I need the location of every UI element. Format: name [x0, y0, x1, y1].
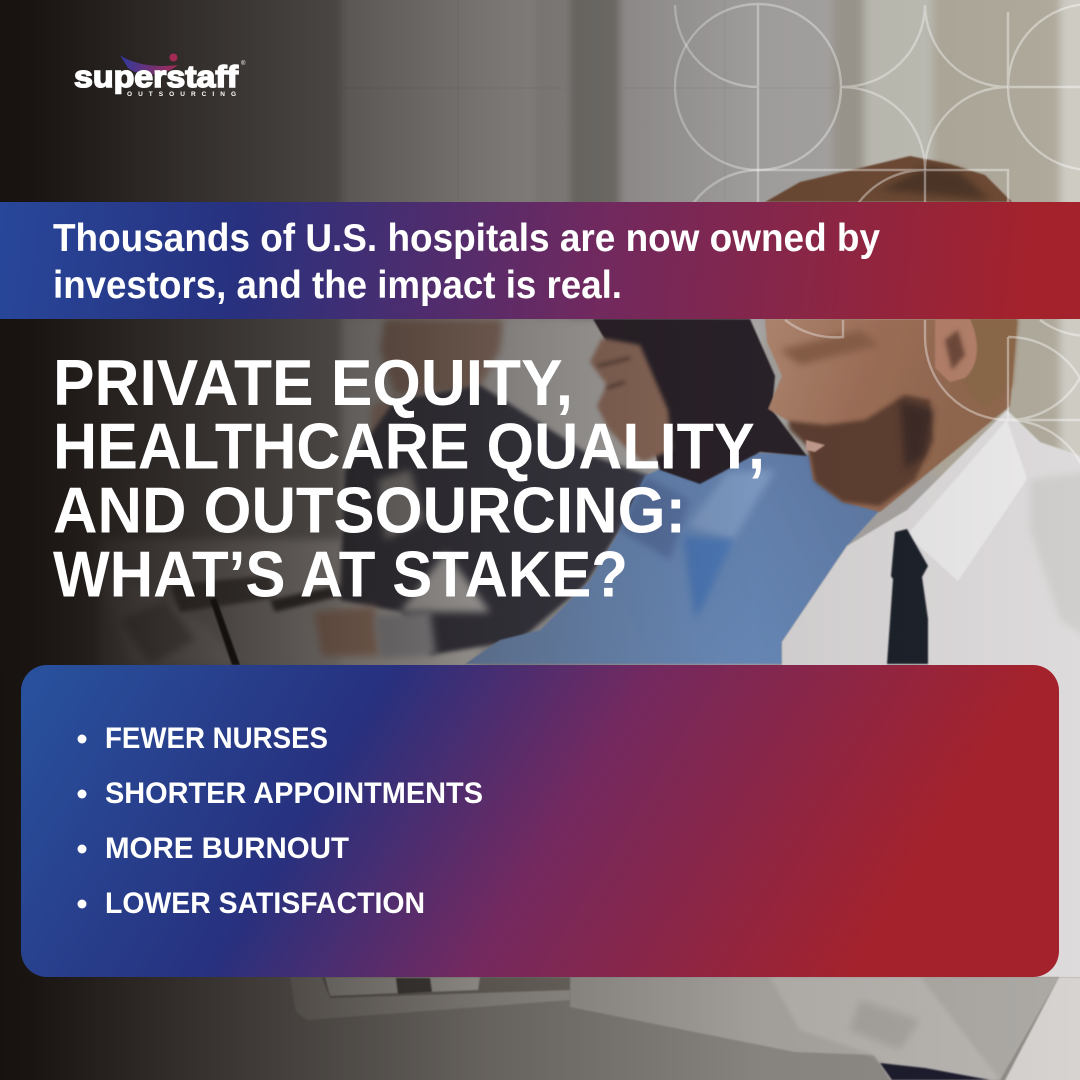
logo swoosh [120, 55, 178, 74]
bullet: fewer nurses: FEWER NURSES [105, 722, 328, 755]
bearded man [765, 156, 1018, 512]
bullet: shorter appointments: SHORTER APPOINTMENTS [105, 777, 483, 810]
logo: superstaff outsourcing [74, 54, 246, 98]
main heading: AND OUTSOURCING: [53, 474, 686, 546]
subtitle text: Thousands of U.S. hospitals are now owned by [53, 217, 880, 260]
main heading: WHAT’S AT STAKE? [53, 538, 628, 610]
subtitle text: investors, and the impact is real. [53, 264, 622, 307]
main heading: HEALTHCARE QUALITY, [53, 410, 765, 482]
gradient subtitle band [0, 202, 1080, 319]
main heading: PRIVATE EQUITY, [53, 346, 573, 419]
desk, keyboard and laptop [0, 977, 1080, 1080]
man's white shirt and tie [782, 410, 1080, 985]
main heading [53, 346, 765, 610]
panel: impact list [21, 665, 1059, 977]
decorative geometric line pattern [675, 4, 1080, 503]
logo tagline: OUTSOURCING [127, 91, 236, 98]
older man in suit [314, 319, 650, 658]
bullet: lower satisfaction: LOWER SATISFACTION [105, 887, 425, 920]
logo wordmark: superstaff [74, 59, 239, 94]
logo registered mark: ® [241, 60, 246, 67]
woman in blue shirt [465, 319, 880, 664]
subtitle text [53, 217, 880, 307]
logo dot [170, 54, 178, 62]
laptop and books on the table [95, 560, 345, 665]
bullet: more burnout: MORE BURNOUT [105, 832, 349, 865]
